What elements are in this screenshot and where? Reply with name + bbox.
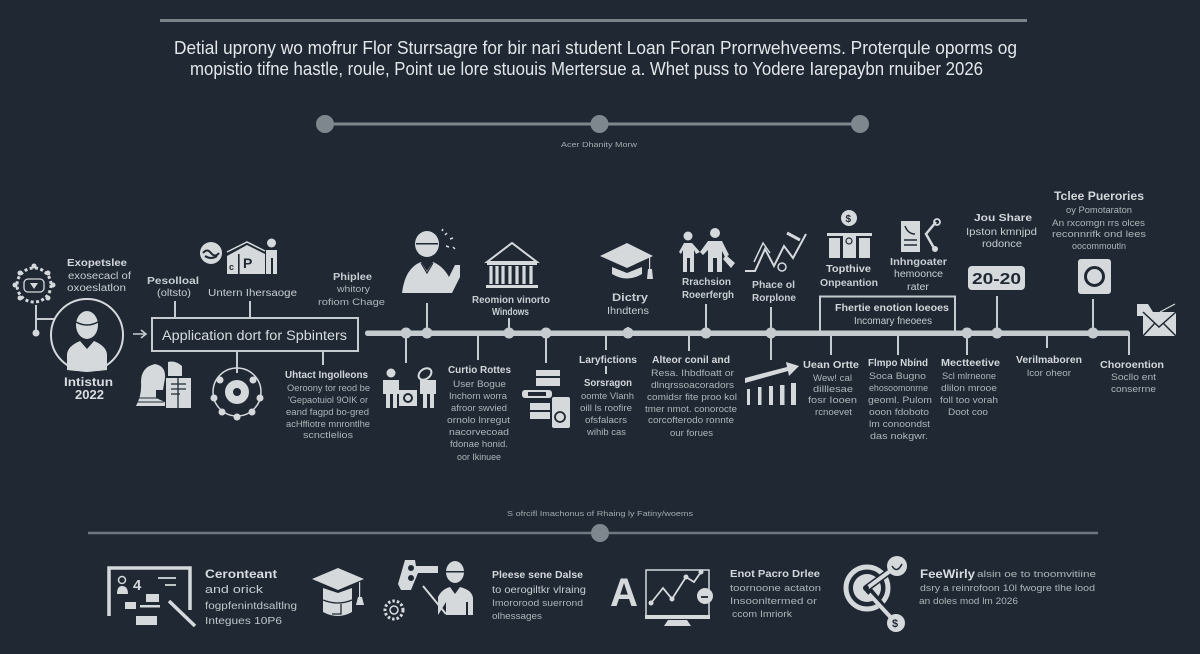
- text: uean ortte: dilllesae: [813, 384, 853, 394]
- text: layfictions: wihib cas: [586, 427, 627, 437]
- text: alteor: dlnqrssoacoradors: [651, 380, 735, 390]
- text: feewirly: dsry a reinrofoon 10l fwogre tlhe lood: [920, 583, 1095, 593]
- text: feewirly: [919, 567, 1096, 606]
- text: alteor: our forues: [670, 428, 714, 438]
- text: mectteetive: Doot coo: [948, 407, 988, 417]
- icon: graduation cap: [600, 243, 653, 279]
- text: intake 2022: [64, 375, 113, 402]
- text: ceronteant: and orick: [205, 584, 264, 596]
- text: curtio rottes: fdonae honid.: [450, 439, 508, 449]
- application box: Application dort for Spbinters: [162, 328, 347, 343]
- top stepper: Acer Dhanity Morw: [561, 142, 638, 149]
- main timeline axis: [365, 296, 1130, 374]
- text: curtio rottes: ornolo lnregut: [447, 415, 511, 425]
- text: uean ortte: fosr Iooen: [808, 395, 857, 405]
- text: jou share: Jou Share: [974, 212, 1032, 224]
- text: alteor: tmer nmot. conorocte: [645, 404, 737, 414]
- text: reception: [472, 295, 550, 318]
- top stepper: [316, 115, 869, 149]
- icon: cards and documents: [522, 370, 570, 428]
- icon: ring badge: [1078, 259, 1111, 294]
- icon: target with smiley and dollar: [846, 556, 907, 632]
- text: personal: Pesolloal: [147, 276, 199, 287]
- title: Detial uprony wo mofrur Flor Sturrsagre for bir nari student Loan Foran Prorrwehveems. Proterqule oporms og: [174, 38, 1017, 58]
- icon: bar chart with arrow: [745, 362, 799, 405]
- text: tclee puerories: oy Pomotaraton: [1066, 205, 1132, 215]
- text: mectteetive: Scl mlrneone: [942, 371, 996, 381]
- text: contact ingolleons: Uhtact Ingolleons: [285, 369, 368, 381]
- text: layfictions: Laryfictions: [579, 354, 637, 366]
- connectors: application box: [175, 301, 323, 373]
- text: tclee puerories: Tclee Puerories: [1054, 189, 1144, 203]
- text: inhngoater: rater: [907, 282, 930, 293]
- text: personal: (oltsto): [157, 288, 191, 299]
- text: enot pacro drlee: ccom Imriork: [732, 609, 793, 619]
- text: expected block: oxoeslatlon: [67, 283, 126, 294]
- text: phiplee: Phiplee: [333, 272, 372, 283]
- icon: handshake and house: P: [243, 255, 252, 271]
- text: phase of: Rorplone: [752, 293, 796, 304]
- icon: graduation cap with book: [312, 568, 364, 616]
- text: layfictions: oomte Vlanh: [581, 391, 634, 401]
- text: intake 2022: Intistun: [64, 375, 113, 389]
- text: intake 2022: 2022: [75, 387, 104, 402]
- text: layfictions: Sorsragon: [584, 377, 632, 389]
- text: tclee puerories: reconnrifk ond lees: [1052, 229, 1147, 239]
- text: feewirly: an doles mod lm 2026: [919, 596, 1018, 606]
- text: personal: [147, 276, 199, 299]
- text: curtio rottes: afroor swvied: [451, 403, 507, 413]
- text: curtio rottes: oor Ikinuee: [457, 452, 501, 462]
- text: research: [682, 277, 734, 301]
- text: research: Roeerfergh: [682, 290, 734, 301]
- icon: board with pencil: [109, 568, 195, 626]
- text: enot pacro drlee: Enot Pacro Drlee: [730, 568, 820, 580]
- text: dictry: Dictry: [612, 292, 649, 304]
- text: flmpo nbind: Flmpo Nbínd: [868, 357, 928, 369]
- text: please send date: Pleese sene Dalse: [492, 569, 583, 581]
- text: phase of: Phace ol: [752, 280, 795, 291]
- text: ceronteant: Ceronteant: [205, 567, 277, 581]
- text: flmpo nbind: lm conoondst: [869, 419, 931, 429]
- icon: bank with dollar: [827, 210, 872, 258]
- text: contact ingolleons: scnctlelios: [303, 430, 354, 440]
- text: alteor: comidsr fite proo kol: [647, 392, 737, 402]
- lower section divider: [88, 509, 1098, 542]
- lower section divider: S ofrcifl Imachonus of Rhaing ly Fatiny/woems: [507, 509, 693, 518]
- icon: document and wrench: [901, 219, 940, 252]
- text: verilmaboren: [1016, 354, 1082, 378]
- text: phiplee: whitory: [336, 284, 371, 294]
- text: flmpo nbind: geoml. Pulom: [868, 395, 932, 405]
- text: choroention: Socllo ent: [1111, 372, 1157, 382]
- bracket callout: incentive notes: Fhertie enotion loeoes: [835, 302, 949, 314]
- text: alteor: [645, 354, 737, 438]
- icon: engineer: [402, 229, 460, 293]
- text: research: Rrachsion: [682, 277, 731, 288]
- text: topthive: [820, 263, 878, 289]
- text: uean ortte: Wew! cal: [813, 373, 852, 383]
- text: choroention: [1100, 359, 1164, 394]
- text: reception: Windows: [492, 307, 529, 318]
- icon: profile and book: [136, 362, 191, 408]
- text: contact ingolleons: Oeroony tor reod be: [287, 383, 370, 393]
- text: enot pacro drlee: [730, 568, 821, 619]
- arrow: [133, 330, 146, 338]
- text: curtio rottes: Curtio Rottes: [448, 364, 511, 376]
- text: layfictions: [579, 354, 637, 437]
- icon: handshake and house: c: [229, 262, 234, 272]
- text: flmpo nbind: Soca Bugno: [869, 371, 926, 381]
- text: please send date: Imororood suerrond: [492, 598, 583, 608]
- connector: gear to intake: [32, 305, 54, 336]
- text: contact ingolleons: 'Gepaotuiol 9OIK or: [288, 395, 368, 405]
- text: tclee puerories: oocommoutln: [1072, 241, 1126, 251]
- text: alteor: corcofterodo ronnte: [648, 415, 734, 425]
- text: ceronteant: [205, 567, 297, 627]
- text: inhngoater: [890, 257, 947, 293]
- icon: monitor with chart: [645, 570, 713, 626]
- text: flmpo nbind: ehosoomonrne: [869, 383, 928, 393]
- text: mectteetive: [940, 357, 1000, 417]
- text: phase of: [752, 280, 796, 304]
- icon: letter A: A: [610, 571, 638, 615]
- icon: robot arm and person: [385, 560, 473, 619]
- icon: handshake and house: [200, 238, 277, 274]
- text: topthive: Onpeantion: [820, 278, 878, 289]
- text: layfictions: ofsfalacrs: [585, 415, 628, 425]
- text: contact ingolleons: [285, 369, 370, 440]
- icon: person in circle: [51, 299, 123, 372]
- text: uean ortte: [803, 359, 859, 417]
- text: expected block: [67, 257, 131, 294]
- icon: board with pencil: 4: [133, 577, 142, 594]
- text: phiplee: [318, 272, 385, 307]
- text: ceronteant: fogpfenintdsaltlng: [205, 600, 297, 612]
- text: please send date: olhessages: [492, 611, 543, 621]
- text: please send date: to oerogiltkr vlraing: [492, 585, 586, 596]
- icon: bank: [486, 243, 538, 288]
- text: uean ortte: rcnoevet: [815, 407, 853, 417]
- text: curtio rottes: User Bogue: [453, 379, 506, 389]
- text: alteor: Resa. Ihbdfoatt or: [651, 368, 734, 378]
- icon: network ring: [210, 368, 264, 420]
- title: mopistio tifne hastle, roule, Point ue lore stuouis Mertersue a. Whet puss to Yodere Iarepaybn rnuiber 2026: [190, 59, 983, 79]
- icon: zigzag chart: [745, 233, 806, 271]
- text: contact ingolleons: acHffiotre mnrontlhe: [286, 419, 370, 429]
- text: curtio rottes: Inchorn worra: [449, 391, 507, 401]
- text: uniform heritage: Untern Ihersaoge: [208, 288, 297, 299]
- icon: envelope: [1137, 304, 1176, 336]
- text: enot pacro drlee: Insoonltermed or: [730, 596, 817, 606]
- text: reception: Reomion vinorto: [472, 295, 550, 306]
- text: mectteetive: Mectteetive: [941, 357, 1000, 369]
- text: uean ortte: Uean Ortte: [803, 359, 859, 371]
- text: choroention: conserrne: [1111, 384, 1156, 394]
- badge: 20-20: [968, 266, 1025, 290]
- text: flmpo nbind: das nokgwr.: [870, 431, 928, 441]
- text: please send date: [492, 569, 586, 621]
- icon: gear: [12, 264, 56, 302]
- text: phiplee: rofiom Chage: [318, 297, 385, 307]
- text: layfictions: oill ls roofire: [580, 403, 632, 413]
- bracket callout: incentive notes: Incomary fneoees: [854, 316, 932, 327]
- bracket callout: incentive notes: [820, 296, 955, 333]
- text: jou share: [966, 212, 1037, 250]
- text: dictry: Ihndtens: [607, 306, 649, 317]
- icon: target with smiley and dollar: $: [892, 618, 898, 630]
- text: topthive: Topthive: [826, 263, 871, 275]
- badge: 20-20: 20-20: [972, 271, 1021, 288]
- text: expected block: Exopetslee: [67, 257, 127, 269]
- text: alteor: Alteor conil and: [652, 354, 730, 366]
- text: expected block: exosecacl of: [68, 271, 131, 282]
- text: choroention: Choroention: [1100, 359, 1164, 371]
- text: verilmaboren: Verilmaboren: [1016, 354, 1082, 366]
- text: curtio rottes: nacorvecoad: [449, 427, 509, 437]
- text: inhngoater: hemoonce: [894, 269, 943, 280]
- text: jou share: Ipston kmnjpd: [966, 227, 1037, 238]
- text: verilmaboren: lcor oheor: [1027, 368, 1071, 378]
- text: dictry: [607, 292, 649, 317]
- text: jou share: rodonce: [982, 239, 1022, 250]
- text: enot pacro drlee: toornoone actaton: [730, 583, 821, 593]
- icon: family with camera: [383, 366, 436, 408]
- text: tclee puerories: [1052, 189, 1147, 251]
- title: [174, 38, 1017, 79]
- text: flmpo nbind: ooon fdoboto: [869, 407, 929, 417]
- text: inhngoater: Inhngoater: [890, 257, 947, 268]
- text: curtio rottes: [447, 364, 511, 462]
- text: feewirly: alsin oe to tnoomvitiine: [977, 569, 1096, 579]
- icon: bank with dollar: $: [846, 214, 852, 225]
- text: mectteetive: dlilon mrooe: [941, 383, 997, 393]
- text: mectteetive: foll too vorah: [940, 395, 998, 405]
- icon: two people: [679, 228, 735, 272]
- text: ceronteant: Integues 10P6: [205, 615, 282, 627]
- application box: [152, 318, 358, 351]
- text: flmpo nbind: [868, 357, 932, 441]
- text: tclee puerories: An rxcomgn rrs olces: [1052, 218, 1146, 228]
- text: feewirly: FeeWirly: [920, 567, 975, 581]
- text: contact ingolleons: eand fagpd bo-gred: [286, 407, 369, 417]
